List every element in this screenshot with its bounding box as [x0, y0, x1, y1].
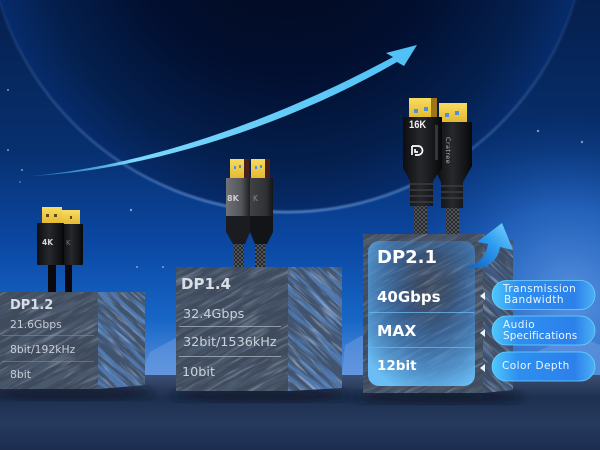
spec lines DP1.2: 8bit: [10, 368, 31, 381]
stone block DP2.1: [363, 234, 513, 393]
DP1.2 cable pair: [37, 207, 83, 293]
callout: audio specifications: Audio: [503, 319, 535, 331]
spec lines DP1.4: 32bit/1536kHz: [183, 335, 277, 350]
label DP1.4: DP1.4: [181, 275, 231, 293]
callout: color depth: Color Depth: [502, 360, 570, 372]
spec panel DP2.1: [368, 241, 475, 386]
growth arrow: [31, 45, 417, 176]
floor: [0, 375, 600, 450]
stone block DP1.2: [0, 292, 145, 389]
spec lines DP1.2: 8bit/192kHz: [10, 343, 76, 356]
spec lines DP1.2: [10, 318, 76, 381]
spec panel DP2.1: MAX: [377, 322, 416, 340]
callout: transmission bandwidth: Bandwidth: [504, 294, 564, 306]
DP1.4 cable pair: 8K: [227, 194, 240, 203]
callout: transmission bandwidth: [480, 280, 595, 310]
DP2.1 cable pair: [403, 98, 472, 235]
callout: transmission bandwidth: Transmission: [502, 283, 576, 295]
spec lines DP1.2: 21.6Gbps: [10, 318, 62, 331]
spec panel DP2.1: 12bit: [377, 358, 417, 374]
DP1.4 cable pair: K: [253, 194, 259, 203]
callout: audio specifications: Specifications: [503, 330, 577, 342]
DP2.1 cable pair: Cratree: [444, 137, 452, 164]
DP1.2 cable pair: K: [66, 239, 71, 247]
stone block DP1.4: [176, 267, 342, 391]
label DP1.2: DP1.2: [10, 298, 53, 313]
DP1.4 cable pair: [226, 159, 273, 268]
DP1.2 cable pair: 4K: [42, 238, 54, 247]
DP2.1 cable pair: 16K: [409, 119, 427, 131]
spec lines DP1.4: [182, 307, 277, 380]
icon: DisplayPort logo: [412, 146, 423, 155]
spec panel DP2.1: DP2.1: [377, 247, 437, 268]
callout: color depth: [480, 352, 595, 381]
spec panel DP2.1: 40Gbps: [377, 288, 441, 306]
spec lines DP1.4: 32.4Gbps: [183, 307, 245, 322]
callout: audio specifications: [480, 316, 595, 345]
spec lines DP1.4: 10bit: [182, 365, 215, 380]
curved up arrow: [466, 223, 513, 268]
